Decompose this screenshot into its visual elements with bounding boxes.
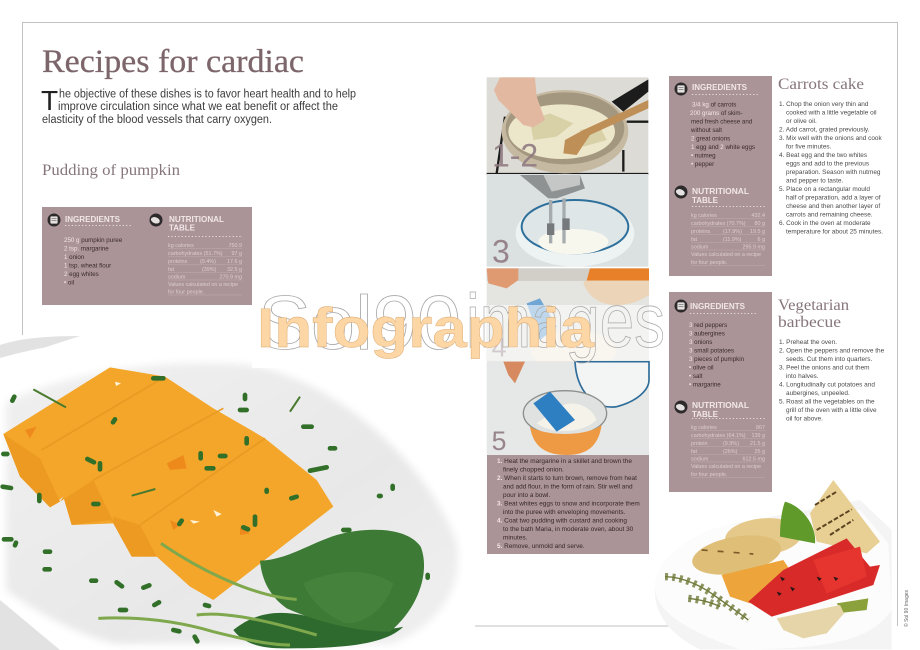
- nutrition table: sodium: [691, 244, 709, 250]
- nutrition table: proteins: [691, 229, 710, 235]
- photo fade under watermark: [487, 305, 649, 361]
- nutrition table: for four people.: [691, 260, 727, 266]
- nutrition table: carbohydrates (70.7%): [691, 221, 746, 227]
- pumpkin slice: [722, 560, 790, 603]
- ingredients list: 3/4 kg of carrots: [692, 102, 736, 108]
- nutrition table: 32.5 g: [227, 267, 242, 273]
- nutrition table: 17.6 g: [227, 259, 242, 265]
- watermark: [257, 279, 665, 366]
- nutrition heading: NUTRITIONAL: [692, 187, 749, 196]
- nutrition table: fat: [691, 237, 697, 243]
- nutrition table: (17.9%): [723, 229, 742, 235]
- nutrition table: 25 g: [754, 449, 765, 455]
- step number 3: 3: [492, 233, 510, 269]
- ingredients list: 2 great onions: [691, 136, 730, 142]
- kiwi slice: [837, 598, 868, 613]
- step number 5: 5: [492, 426, 506, 456]
- nutrition table: (11.9%): [723, 237, 742, 243]
- ingredients list: 200 grams of skim-: [690, 110, 743, 117]
- panel: preparation steps: minutes.: [503, 534, 528, 542]
- panel: preparation steps: finely chopped onion.: [503, 466, 564, 474]
- spinach leaves: [98, 530, 424, 648]
- nutrition table: kg calories: [691, 425, 717, 431]
- vegetarian barbecue steps: oil for above.: [786, 416, 823, 422]
- icon: nutrition plate: [150, 214, 162, 226]
- copyright note: © Sol 90 Images: [903, 590, 910, 627]
- ingredients list: 3 pieces of pumpkin: [689, 356, 745, 363]
- panel: preparation steps: to the bath Maria, in moderate oven, about 30: [503, 526, 634, 533]
- vegetarian barbecue steps: [779, 339, 885, 422]
- vegetarian barbecue steps: grill of the oven with a little olive: [786, 407, 877, 414]
- nutrition table: 80 g: [754, 221, 765, 227]
- panel: preparation steps: 3. Beat whites eggs to snow and incorporate them: [497, 500, 640, 508]
- nutrition table: 21.5 g: [750, 441, 765, 447]
- carrots cake steps: half of preparation, add a layer of: [786, 194, 881, 202]
- nutrition table: Values calculated on a recipe: [691, 464, 761, 470]
- panel: vegetarian barbecue ingredients and nutrition: [669, 292, 772, 492]
- icon: ingredients list: [674, 300, 688, 312]
- nutrition table: 270.9 mg: [220, 274, 242, 280]
- watermark: Infographia: [257, 296, 595, 359]
- nutrition table: 432.4: [752, 213, 765, 219]
- nutrition table: (39%): [202, 267, 217, 273]
- carrots cake steps: carrots and remaining cheese.: [786, 212, 873, 218]
- icon: nutrition plate: [674, 186, 688, 198]
- nutrition heading: TABLE: [692, 196, 719, 205]
- ingredients list: 1 tsp. wheat flour: [64, 262, 111, 270]
- vegetarian barbecue steps: 1. Preheat the oven.: [779, 339, 837, 346]
- ingredients list: without salt: [690, 127, 722, 134]
- vegetarian barbecue steps: 4. Longitudinally cut potatoes and: [779, 382, 875, 388]
- carrots cake steps: 6. Cook in the oven at moderate: [779, 220, 871, 227]
- watermark: Sol90: [258, 281, 461, 366]
- chives: [33, 389, 300, 496]
- panel: preparation steps: 1. Heat the margarine in a skillet and brown the: [497, 458, 632, 465]
- panel: carrots cake ingredients and nutrition: [669, 76, 772, 276]
- nutrition table: 867: [756, 425, 765, 431]
- nutrition table: [691, 425, 765, 478]
- step photo 3: electric mixer and bowl: [487, 174, 648, 269]
- step number 4: 4: [492, 333, 507, 363]
- heading: pudding of pumpkin: Pudding of pumpkin: [42, 162, 180, 179]
- step number 1-2: 1-2: [492, 138, 538, 174]
- icon: nutrition plate: [674, 400, 688, 414]
- title: Recipes for cardiac: [42, 44, 304, 80]
- ingredients list: 250 g pumpkin puree: [64, 237, 123, 244]
- ingredients heading: INGREDIENTS: [65, 215, 121, 224]
- nutrition table: Values calculated on a recipe: [168, 282, 238, 288]
- panel: preparation steps: [487, 455, 649, 554]
- nutrition heading: NUTRITIONAL: [169, 215, 224, 224]
- panel: preparation steps: 2. When it starts to turn brown, remove from heat: [497, 475, 637, 482]
- panel: preparation steps: into the puree with enveloping movements.: [503, 509, 626, 516]
- carrots cake steps: 2. Add carrot, grated previously.: [779, 126, 870, 134]
- step photo 4: mixing with spatula: [487, 268, 649, 370]
- thyme sprig: [665, 577, 748, 620]
- ingredients list: 2 tsp. margarine: [64, 246, 109, 252]
- step photo 1-2: pan on stove: [487, 77, 648, 174]
- nutrition table: Values calculated on a recipe: [691, 252, 761, 258]
- photo: grilled vegetables on plate: [655, 480, 892, 649]
- panel: preparation steps: pour into a bowl.: [503, 492, 550, 499]
- nutrition table: kg calories: [691, 213, 717, 219]
- nutrition table: (9.4%): [200, 259, 216, 265]
- ingredients list: • margarine: [689, 382, 721, 388]
- carrots cake steps: preparation. Season with nutmeg: [786, 169, 881, 176]
- nutrition table: protein: [691, 441, 707, 447]
- nutrition table: 19.5 g: [750, 229, 765, 235]
- ingredients list: 1 egg and 2 white eggs: [691, 144, 755, 151]
- vegetarian barbecue steps: 3. Peel the onions and cut them: [779, 364, 870, 372]
- ingredients heading: INGREDIENTS: [692, 83, 748, 92]
- panel: preparation steps: and add flour, in the form of rain. Stir well and: [503, 484, 633, 490]
- nutrition table: [168, 243, 242, 296]
- grilled onion: [777, 605, 844, 638]
- heading: carrots cake: Carrots cake: [778, 76, 864, 93]
- carrots cake steps: or olive oil.: [786, 118, 817, 125]
- ingredients list: • oil: [64, 280, 74, 286]
- heading: vegetarian barbecue: barbecue: [778, 314, 841, 331]
- intro text: T: [41, 85, 58, 116]
- nutrition table: proteins: [168, 259, 187, 265]
- intro text: he objective of these dishes is to favor heart health and to help: [59, 88, 356, 100]
- nutrition heading: [169, 215, 224, 232]
- nutrition table: carbohydrates (64.1%): [691, 433, 746, 439]
- vegetarian barbecue steps: 5. Roast all the vegetables on the: [779, 398, 875, 406]
- nutrition table: 295.9 mg: [743, 244, 765, 250]
- nutrition table: for four people.: [168, 290, 204, 296]
- watermark: images: [466, 279, 665, 364]
- vegetarian barbecue steps: into halves.: [786, 373, 819, 380]
- intro text: improve circulation since what we eat benefit or affect the: [58, 101, 338, 113]
- icon: ingredients list: [674, 82, 688, 96]
- nutrition table: 612.5 mg: [743, 456, 765, 462]
- panel: preparation steps: 4. Coat two pudding with custard and cooking: [497, 518, 627, 524]
- ingredients heading: INGREDIENTS: [690, 302, 746, 311]
- ingredients list: • olive oil: [689, 364, 714, 372]
- lime wedge: [780, 502, 815, 543]
- carrots cake steps: 3. Mix well with the onions and cook: [779, 135, 882, 142]
- icon: ingredients list: [48, 214, 60, 226]
- ingredients list: • salt: [689, 373, 703, 380]
- carrots cake steps: cooked with a little vegetable oil: [786, 110, 877, 116]
- photo: pudding of pumpkin on plate: [0, 334, 477, 650]
- intro text: elasticity of the blood vessels that carry oxygen.: [42, 114, 272, 126]
- nutrition table: (26%): [723, 449, 738, 455]
- nutrition table: fat: [691, 449, 697, 455]
- panel: preparation steps: 5. Remove, unmold and serve.: [497, 543, 585, 550]
- carrots cake steps: for five minutes.: [786, 144, 832, 150]
- carrots cake steps: 4. Beat egg and the two whites: [779, 152, 867, 159]
- ingredients list: • nutmeg: [691, 152, 716, 160]
- ingredients list: 3 onions: [689, 339, 712, 346]
- vegetarian barbecue steps: 2. Open the peppers and remove the: [779, 348, 885, 354]
- vegetarian barbecue steps: seeds. Cut them into quarters.: [786, 356, 872, 363]
- ingredients list: 1 onion: [64, 254, 85, 261]
- nutrition table: 139 g: [752, 433, 765, 439]
- ingredients list: 2 egg whites: [64, 271, 99, 278]
- carrots cake steps: 5. Place on a rectangular mould: [779, 186, 870, 193]
- ingredients list: [64, 237, 123, 286]
- aubergine slice: [810, 480, 880, 553]
- ingredients list: med fresh cheese and: [691, 118, 753, 126]
- nutrition table: 6 g: [758, 237, 765, 243]
- nutrition heading: TABLE: [692, 410, 719, 419]
- ingredients list: 3 aubergines: [689, 330, 725, 338]
- nutrition table: 97 g: [232, 251, 242, 257]
- watermark backing: [252, 305, 487, 368]
- pudding slices: [3, 367, 333, 600]
- nutrition heading: TABLE: [169, 224, 196, 232]
- nutrition table: sodium: [691, 456, 709, 462]
- nutrition heading: [692, 401, 749, 419]
- nutrition table: [691, 213, 765, 266]
- nutrition table: fat: [168, 267, 174, 273]
- carrots cake steps: temperature for about 25 minutes.: [786, 228, 883, 236]
- carrots cake steps: and pepper to taste.: [786, 178, 843, 184]
- carrots cake steps: [779, 101, 883, 236]
- nutrition heading: NUTRITIONAL: [692, 401, 749, 410]
- ingredients list: 3 small potatoes: [689, 348, 734, 354]
- heading: vegetarian barbecue: [778, 297, 849, 331]
- nutrition table: (9.9%): [723, 441, 739, 447]
- nutrition table: carbohydrates (51.7%): [168, 251, 223, 257]
- ingredients list: 3 red peppers: [689, 322, 727, 329]
- carrots cake steps: 1. Chop the onion very thin and: [779, 101, 869, 108]
- ingredients list: [690, 102, 755, 168]
- intro text: [41, 85, 356, 126]
- ingredients list: [689, 322, 745, 388]
- carrots cake steps: cheese and then another layer of: [786, 203, 880, 210]
- nutrition heading: [692, 187, 749, 205]
- nutrition table: for four people.: [691, 472, 727, 478]
- nutrition table: sodium: [168, 274, 186, 280]
- potato slices: [689, 515, 803, 581]
- nutrition table: 750.9: [228, 243, 242, 249]
- vegetarian barbecue steps: aubergines, unpeeled.: [786, 390, 850, 397]
- heading: vegetarian barbecue: Vegetarian: [778, 297, 849, 314]
- step photo 5: folding egg whites into puree: [487, 362, 649, 456]
- ingredients list: • pepper: [691, 161, 714, 168]
- nutrition table: kg calories: [168, 243, 194, 249]
- panel: pudding ingredients and nutrition: [42, 207, 252, 305]
- carrots cake steps: eggs and add to the previous: [786, 160, 869, 168]
- red pepper: [748, 538, 880, 617]
